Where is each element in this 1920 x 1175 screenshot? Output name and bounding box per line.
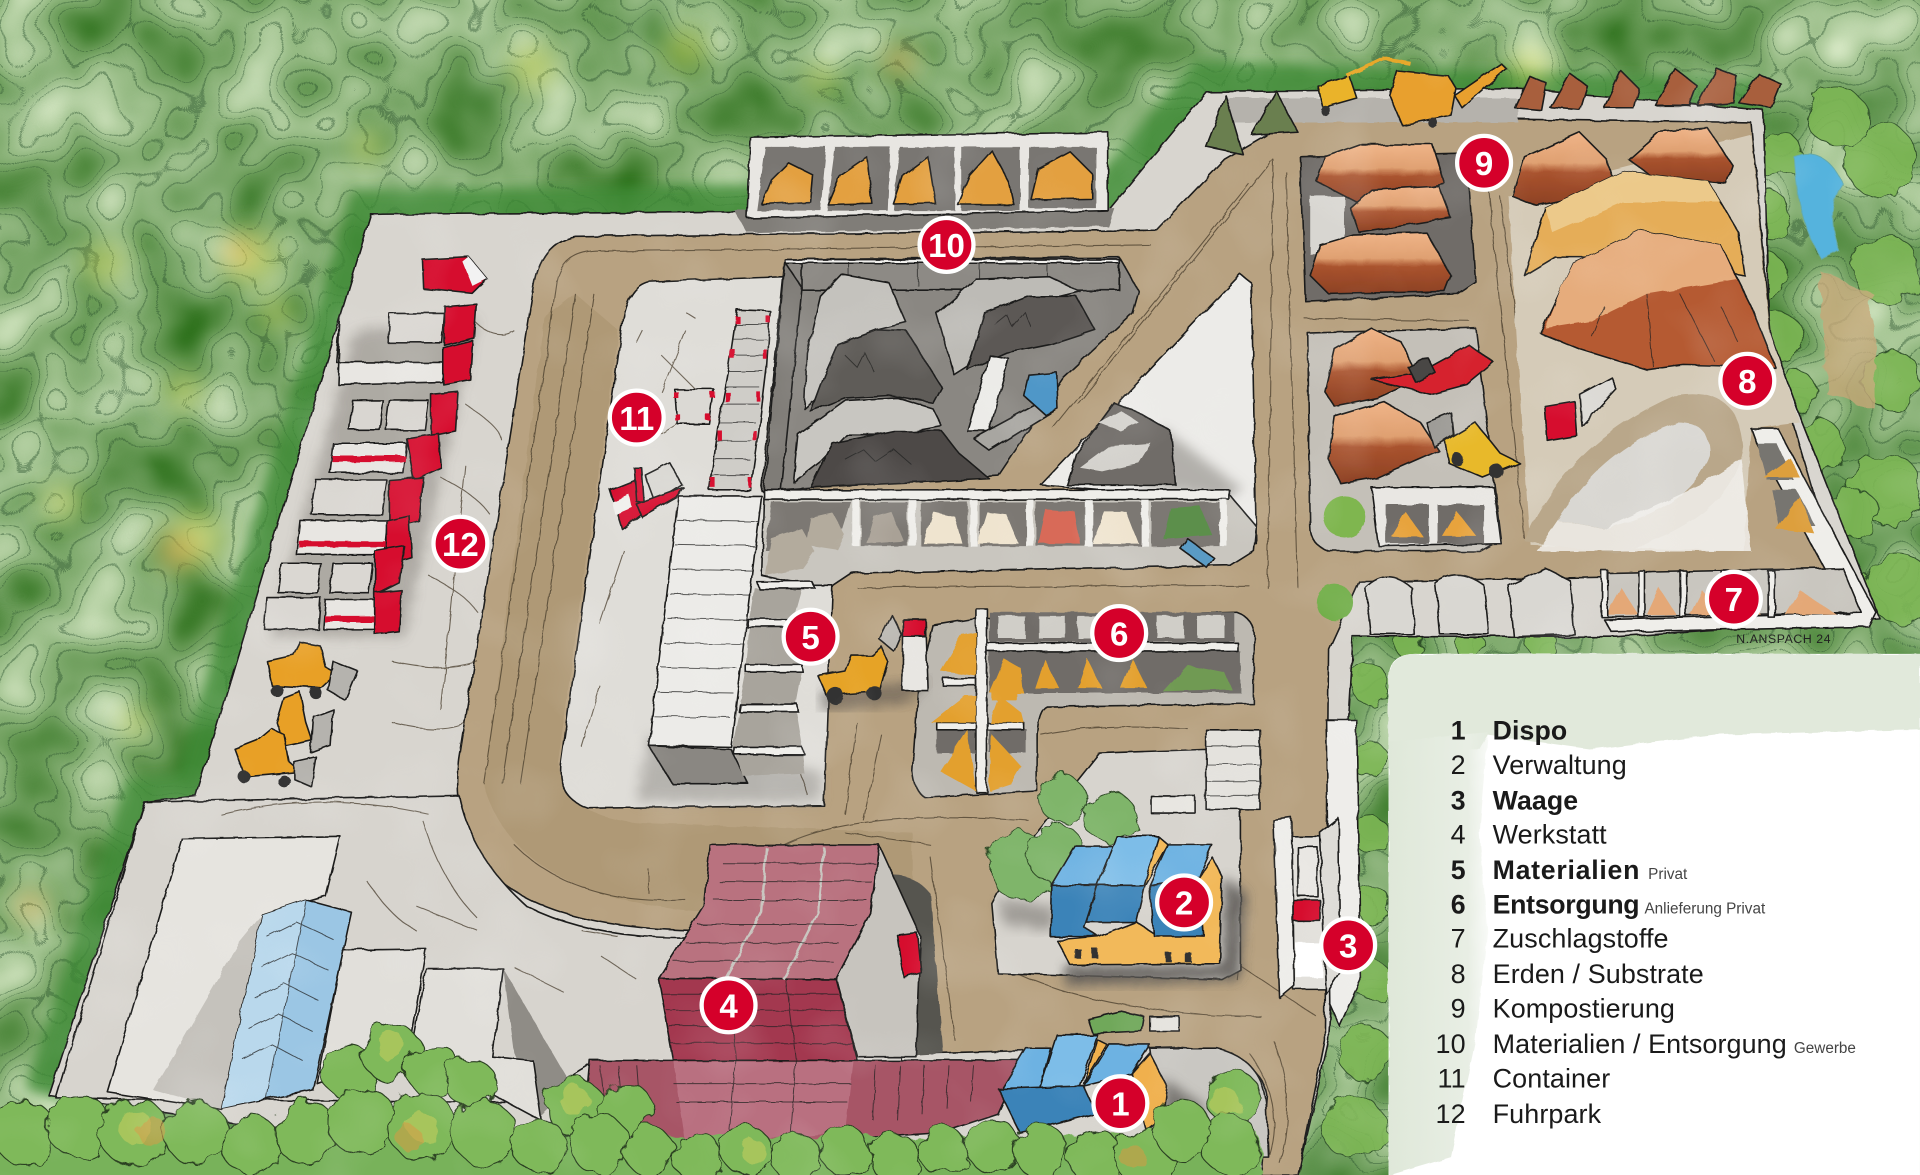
icon: blue truck <box>967 355 1058 451</box>
legend item 6: 6 <box>1451 889 1466 919</box>
marker 4: 4 <box>719 989 738 1026</box>
marker 10 <box>920 218 973 272</box>
marker 8 <box>1720 354 1774 408</box>
marker 10: 10 <box>928 228 965 265</box>
marker 11 <box>610 391 664 444</box>
legend item 4: 4 <box>1451 820 1466 850</box>
legend item 9: 9 <box>1451 994 1466 1024</box>
marker 12 <box>433 517 487 571</box>
hall plate <box>108 836 340 1109</box>
legend item 12 <box>1436 1099 1602 1129</box>
marker 7 <box>1707 572 1761 626</box>
pile with red screener <box>1325 328 1418 407</box>
signature: N.ANSPACH 24 <box>1736 632 1831 646</box>
legend item 10 <box>1436 1029 1856 1059</box>
marker 9 <box>1457 136 1511 190</box>
legend item 10: Materialien / Entsorgung <box>1493 1029 1787 1059</box>
icon: tank truck <box>1545 377 1616 441</box>
marker 4 <box>702 978 756 1032</box>
container row 11 <box>610 310 770 529</box>
legend item 5: 5 <box>1451 855 1466 885</box>
loader and truck near 5 <box>818 615 931 710</box>
legend item 6: Entsorgung <box>1493 889 1639 919</box>
marker 11: 11 <box>619 401 654 438</box>
trees: foreground bottom <box>0 1024 1261 1175</box>
legend item 12: 12 <box>1436 1099 1466 1129</box>
legend item 7: Zuschlagstoffe <box>1493 924 1669 954</box>
legend item 3 <box>1451 785 1578 815</box>
legend item 5 <box>1451 855 1688 885</box>
panel: machine area lower <box>1308 328 1520 551</box>
panel: legend <box>1389 654 1920 1175</box>
marker 7: 7 <box>1725 582 1743 619</box>
legend item 2: Verwaltung <box>1493 750 1627 780</box>
panel: scale 3 <box>1273 720 1360 1026</box>
panel: aggregate bays 7 <box>1316 429 1876 637</box>
panel: white concrete steps and glass hall <box>222 900 572 1120</box>
legend item 8: Erden / Substrate <box>1493 959 1704 989</box>
pile: lower left <box>793 398 942 482</box>
legend item 5: Materialien <box>1493 855 1640 885</box>
roll-off truck <box>610 463 683 529</box>
panel: bay row 5/6 top <box>762 490 1256 585</box>
marker 6: 6 <box>1110 616 1128 653</box>
legend item 3: Waage <box>1493 785 1578 815</box>
marker 1 <box>1093 1076 1147 1130</box>
panel: earth piles 8 <box>1509 129 1800 551</box>
panel: disposal bays 6 <box>912 609 1254 797</box>
icon: shredder <box>1390 64 1506 127</box>
marker 12: 12 <box>442 527 479 564</box>
marker 9: 9 <box>1475 146 1493 183</box>
marker 3 <box>1321 918 1375 972</box>
road network <box>458 116 1837 1175</box>
icon: cars <box>1087 1011 1179 1033</box>
truck and turnaround <box>1524 377 1751 553</box>
legend item 12: Fuhrpark <box>1493 1099 1602 1129</box>
panel: fleet vehicles 12 <box>265 257 514 729</box>
facade <box>1057 857 1222 965</box>
pile: grey in triangle <box>1067 403 1176 485</box>
marker 5: 5 <box>801 620 820 657</box>
panel: white triangle yard <box>1041 274 1256 544</box>
legend item 10: Gewerbe <box>1794 1040 1856 1057</box>
legend item 1 <box>1451 716 1567 746</box>
pile row <box>1515 69 1780 110</box>
legend item 6: Anlieferung Privat <box>1644 900 1766 917</box>
panel: compost area 9 <box>1300 144 1476 301</box>
legend item 2: 2 <box>1451 750 1466 780</box>
single container <box>673 389 715 424</box>
marker 2 <box>1157 875 1211 929</box>
roofs <box>1052 846 1116 885</box>
marker 3: 3 <box>1339 929 1357 966</box>
concrete forecourt left <box>56 796 916 1109</box>
marker 1: 1 <box>1111 1086 1130 1123</box>
marker 8: 8 <box>1738 364 1757 401</box>
legend item 5: Privat <box>1648 866 1688 883</box>
panel: materials hall white <box>649 496 816 784</box>
pile: right <box>937 277 1080 375</box>
trees <box>989 776 1135 901</box>
legend item 10: 10 <box>1436 1029 1466 1059</box>
legend item 7: 7 <box>1451 924 1466 954</box>
panel: dispo building 1 <box>998 1011 1269 1157</box>
legend item 8: 8 <box>1451 959 1466 989</box>
icon: excavator <box>1318 59 1411 115</box>
panel: bay row 10 bunkers <box>735 132 1114 233</box>
marker 6 <box>1092 606 1146 660</box>
marker 2: 2 <box>1175 886 1193 923</box>
right and lower forest, brighter <box>1321 87 1920 1158</box>
legend item 11 <box>1438 1063 1610 1093</box>
marker 5 <box>784 610 838 664</box>
van <box>422 257 487 294</box>
icon: red van <box>898 933 921 977</box>
icon: pond <box>1794 154 1843 260</box>
legend item 9: Kompostierung <box>1493 994 1675 1024</box>
legend item 11: 11 <box>1438 1063 1466 1093</box>
panel: workshop building 4 red roof <box>587 845 1022 1149</box>
panel: concrete area 11 <box>561 277 833 808</box>
pile with yellow loader <box>1329 402 1439 484</box>
panel: grey bunker with piles <box>762 257 1139 491</box>
panel: pile row and excavator top <box>1206 59 1780 154</box>
legend item 6 <box>1451 889 1766 919</box>
legend item 11: Container <box>1493 1063 1610 1093</box>
shed <box>1206 730 1260 809</box>
panel: admin building 2 with trees <box>989 730 1260 986</box>
pile: upper left <box>804 274 906 409</box>
bays 5 <box>732 588 804 776</box>
icon: glass roof <box>222 900 351 1108</box>
legend item 1: Dispo <box>1493 716 1567 746</box>
legend item 4: Werkstatt <box>1493 820 1607 850</box>
legend item 3: 3 <box>1451 785 1466 815</box>
legend item 1: 1 <box>1451 716 1466 746</box>
wheel loaders fleet <box>235 643 358 787</box>
